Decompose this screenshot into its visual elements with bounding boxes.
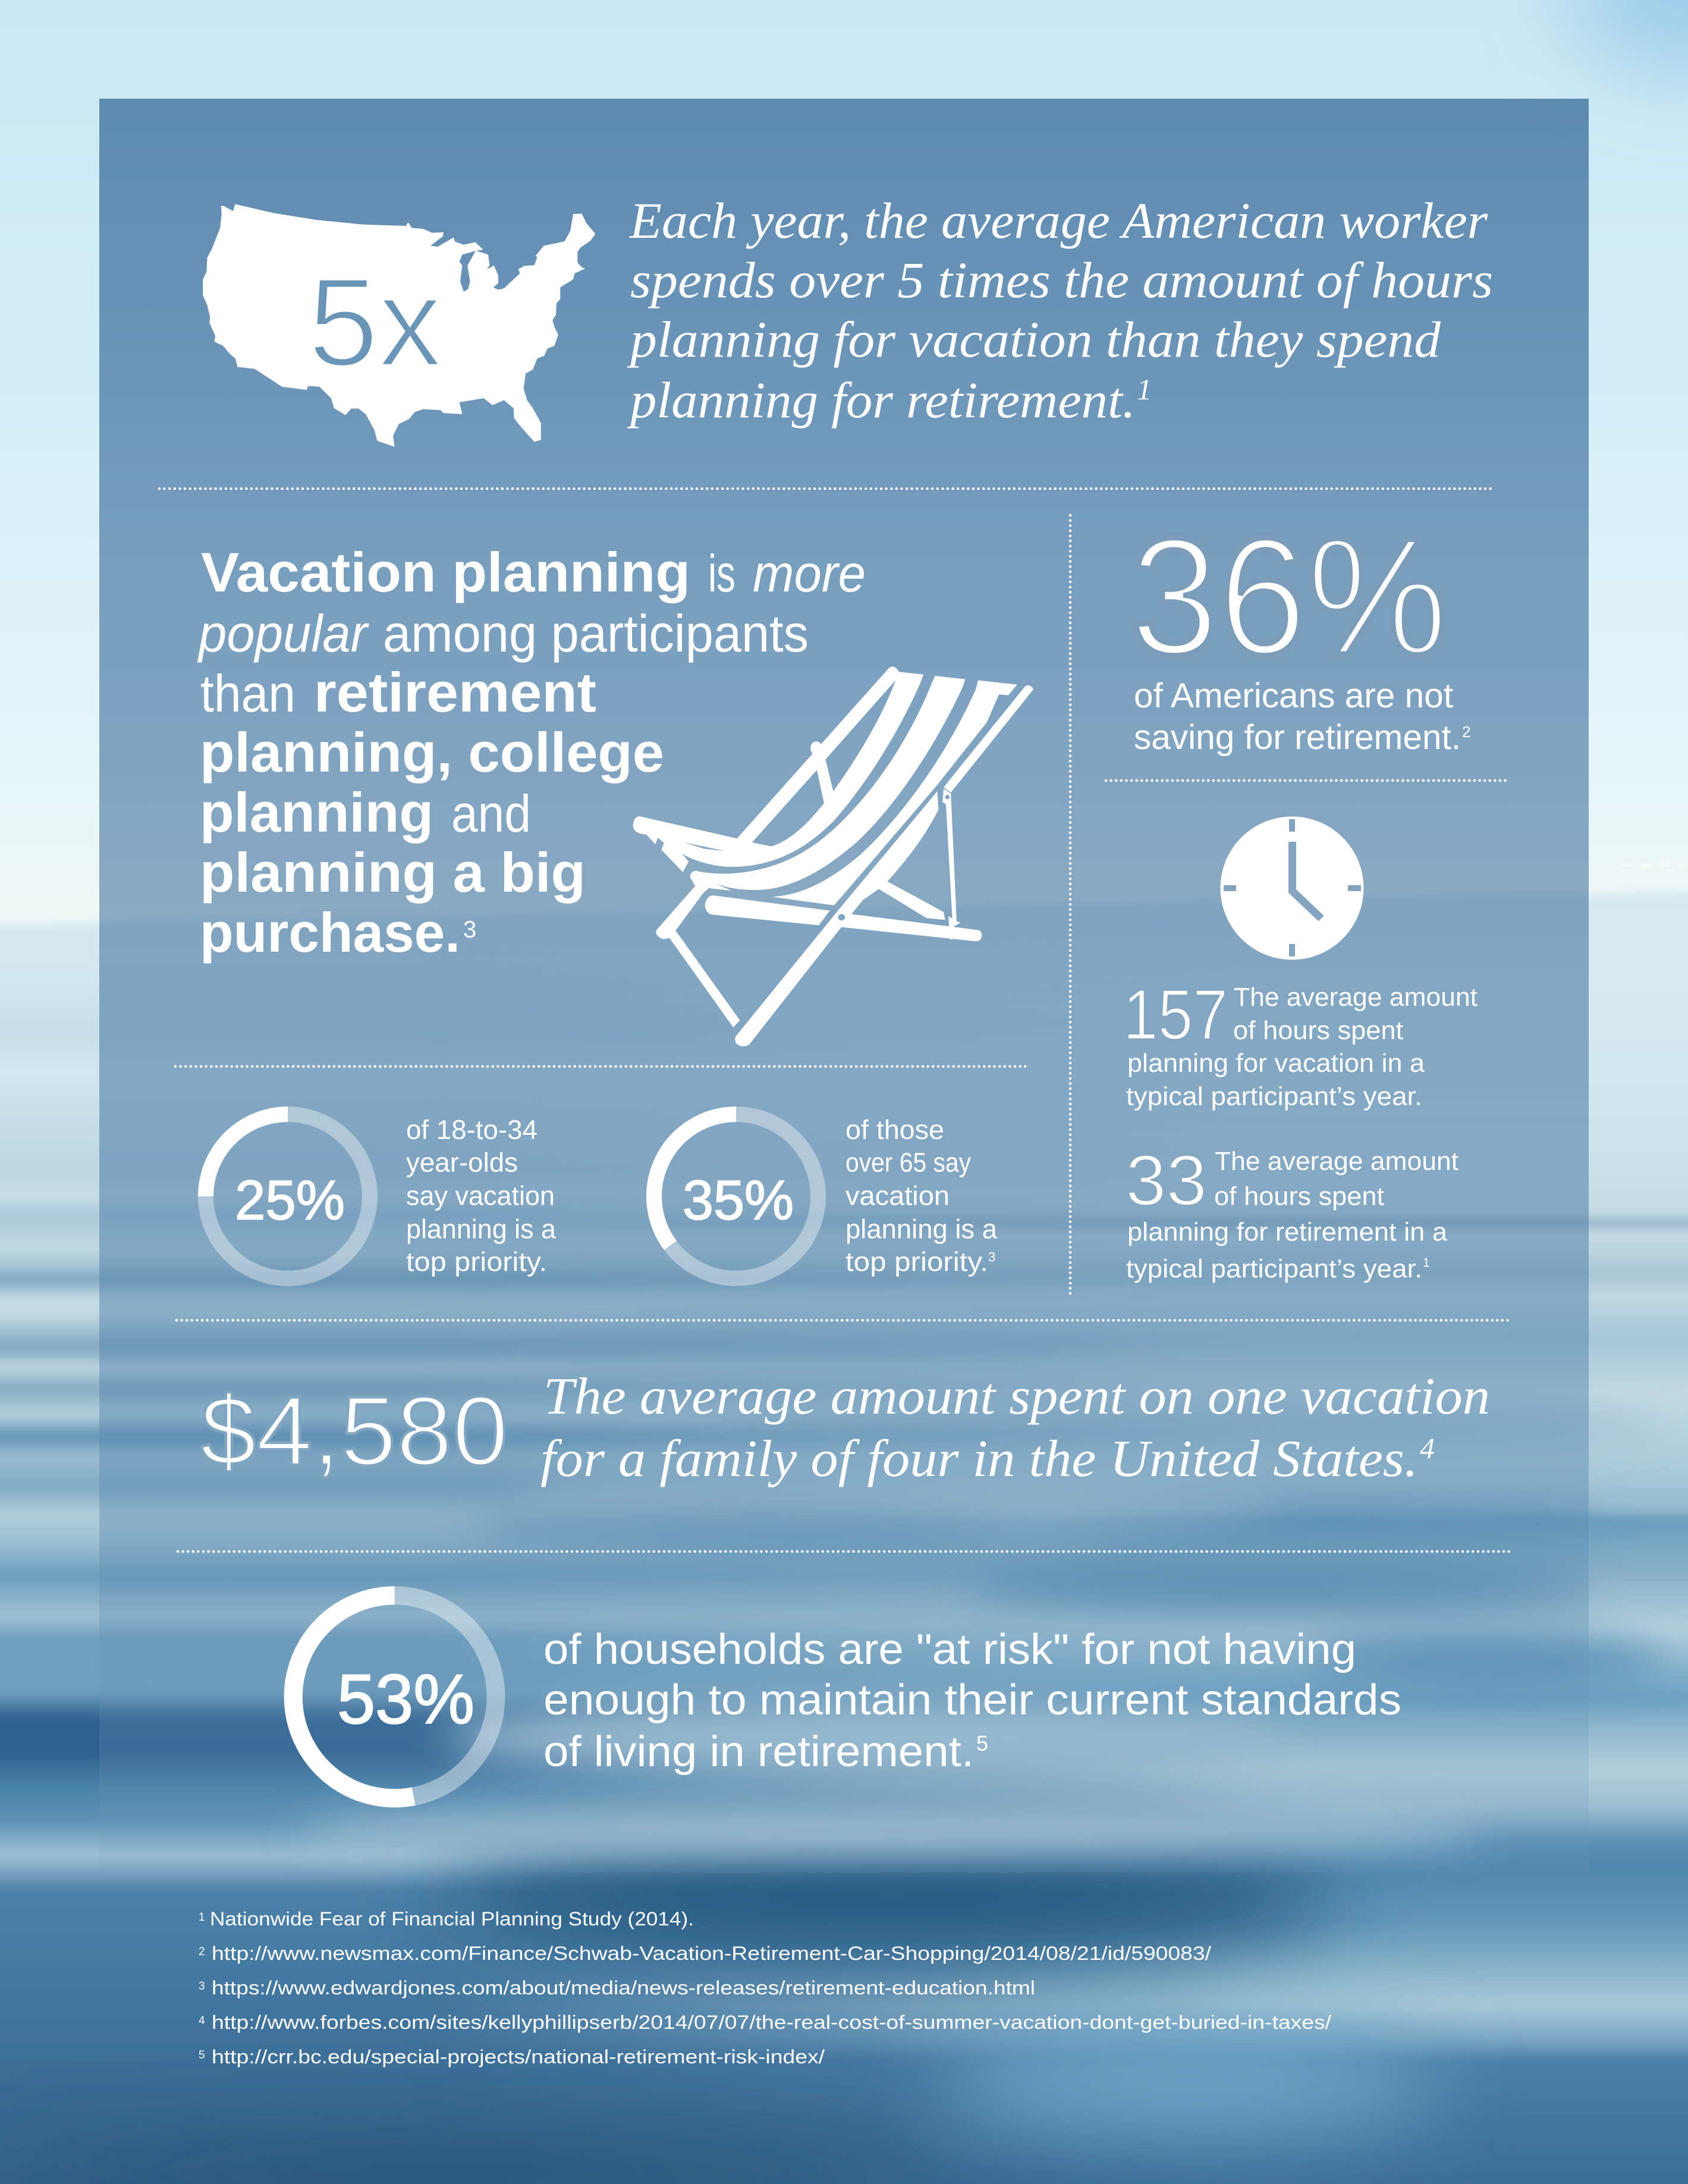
- footnotes: http://www.forbes.com/sites/kellyphillipserb/2014/07/07/the-real-cost-of-summer-vacation-dont-get-buried-in-taxes/: [212, 2012, 1331, 2033]
- caption: 25% of 18-to-34 year-olds: say vacation: [406, 1181, 555, 1211]
- stat: $4,580 average vacation cost: $4,580: [200, 1376, 508, 1486]
- icon: map of the United States: [203, 204, 595, 447]
- section: vacation planning popularity statement: retirement: [314, 661, 596, 723]
- section: vacation planning popularity statement: [197, 541, 866, 964]
- intro statement: planning for retirement.: [627, 372, 1136, 429]
- stat: $4,580 average vacation cost: [200, 1368, 1490, 1488]
- statement: households at risk: of living in retirement.: [543, 1728, 974, 1776]
- footnotes: 4: [199, 2015, 205, 2027]
- caption: 25% of 18-to-34 year-olds: of 18-to-34: [406, 1115, 537, 1145]
- section: vacation planning popularity statement: Vacation planning: [201, 541, 690, 603]
- intro statement: 1: [1137, 373, 1152, 406]
- footnotes: https://www.edwardjones.com/about/media/news-releases/retirement-education.html: [212, 1977, 1035, 1999]
- footnotes: Nationwide Fear of Financial Planning Study (2014).: [210, 1908, 694, 1930]
- ring chart: 25%: 25%: [235, 1169, 345, 1231]
- statement: households at risk: enough to maintain their current standards: [543, 1676, 1401, 1724]
- ring chart: 35%: [654, 1114, 818, 1278]
- statement: households at risk: 5: [976, 1731, 988, 1755]
- icon: beach chair: [633, 666, 1033, 1046]
- section: vacation planning popularity statement: popular: [197, 604, 370, 663]
- stat: $4,580 average vacation cost: for a family of four in the United States.: [540, 1430, 1418, 1488]
- stat: 33 hours planning for retirement: The average amount: [1215, 1147, 1458, 1176]
- stat: 33 hours planning for retirement: typical participant’s year.: [1126, 1254, 1422, 1283]
- caption: 25% of 18-to-34 year-olds: planning is a: [406, 1214, 557, 1244]
- caption: 35% of those over 65: of those: [845, 1115, 944, 1145]
- caption: 25% of 18-to-34 year-olds: [406, 1115, 557, 1277]
- section: vacation planning popularity statement: more: [753, 544, 866, 603]
- stat: 33 hours planning for retirement: [1126, 1141, 1458, 1283]
- stat: 33 hours planning for retirement: 1: [1423, 1256, 1430, 1270]
- footnotes: [199, 1908, 1331, 2067]
- footnotes: http://crr.bc.edu/special-projects/national-retirement-risk-index/: [212, 2046, 825, 2067]
- caption: 35% of those over 65: vacation: [845, 1181, 950, 1211]
- statement: households at risk: [543, 1626, 1401, 1776]
- section: vacation planning popularity statement: among participants: [383, 604, 809, 663]
- section: vacation planning popularity statement: is: [708, 544, 735, 603]
- distant horizon detail: [1620, 860, 1685, 868]
- icon: clock: [1220, 817, 1364, 959]
- stat: $4,580 average vacation cost: 4: [1420, 1431, 1435, 1465]
- section: vacation planning popularity statement: than: [200, 664, 296, 723]
- section: vacation planning popularity statement: planning, college: [200, 721, 664, 783]
- section: vacation planning popularity statement: 3: [463, 917, 476, 943]
- caption: 35% of those over 65: 3: [988, 1250, 995, 1264]
- intro statement: Each year, the average American worker: [628, 192, 1488, 249]
- stat: $4,580 average vacation cost: The average amount spent on one vacation: [543, 1368, 1490, 1425]
- caption: 35% of those over 65: top priority.: [845, 1247, 988, 1277]
- stat: 157 hours planning for vacation: planning for vacation in a: [1127, 1049, 1425, 1078]
- footnotes: 1: [199, 1911, 205, 1924]
- caption: 25% of 18-to-34 year-olds: top priority.: [406, 1247, 547, 1277]
- section: vacation planning popularity statement: purchase.: [200, 901, 460, 964]
- intro statement: spends over 5 times the amount of hours: [630, 251, 1493, 309]
- ring chart: 53%: [293, 1595, 496, 1798]
- section: vacation planning popularity statement: planning: [200, 781, 433, 844]
- stat: 157 hours planning for vacation: typical participant’s year.: [1126, 1082, 1422, 1111]
- stat: 36% not saving: of Americans are not: [1134, 676, 1453, 715]
- panel: translucent main overlay: [99, 99, 1589, 1873]
- section: vacation planning popularity statement: and: [451, 784, 531, 843]
- ring chart: 35%: 35%: [683, 1169, 794, 1231]
- stat: 33 hours planning for retirement: of hours spent: [1214, 1182, 1384, 1211]
- stat: 157 hours planning for vacation: of hours spent: [1233, 1016, 1403, 1045]
- stat: 157 hours planning for vacation: [1123, 975, 1478, 1111]
- ring chart: 25%: [206, 1114, 370, 1278]
- stat: 33 hours planning for retirement: 33: [1126, 1141, 1207, 1220]
- caption: 35% of those over 65: planning is a: [845, 1214, 998, 1244]
- stat: 36% not saving: 2: [1462, 723, 1470, 741]
- caption: 35% of those over 65: [845, 1115, 998, 1277]
- stat: 157 hours planning for vacation: The average amount: [1234, 983, 1478, 1012]
- footnotes: http://www.newsmax.com/Finance/Schwab-Vacation-Retirement-Car-Shopping/2014/08/21/id/590083/: [212, 1943, 1211, 1964]
- map label: 5x: 5x: [308, 251, 442, 392]
- stat: 36% not saving: 36%: [1130, 504, 1448, 690]
- statement: households at risk: of households are "at risk" for not having: [543, 1626, 1356, 1673]
- stat: 157 hours planning for vacation: 157: [1123, 975, 1228, 1055]
- intro statement: planning for vacation than they spend: [627, 311, 1441, 368]
- intro statement: [627, 192, 1493, 429]
- footnotes: 2: [199, 1946, 205, 1958]
- caption: 35% of those over 65: over 65 say: [845, 1147, 971, 1178]
- stat: 33 hours planning for retirement: planning for retirement in a: [1127, 1217, 1448, 1247]
- section: vacation planning popularity statement: planning a big: [200, 841, 586, 904]
- footnotes: 3: [199, 1980, 205, 1993]
- ring chart: 53%: 53%: [337, 1660, 474, 1739]
- section: 5x map and intro statement: [203, 192, 1493, 447]
- caption: 25% of 18-to-34 year-olds: year-olds: [406, 1147, 518, 1178]
- footnotes: 5: [199, 2049, 205, 2062]
- stat: 36% not saving: saving for retirement.: [1134, 718, 1461, 757]
